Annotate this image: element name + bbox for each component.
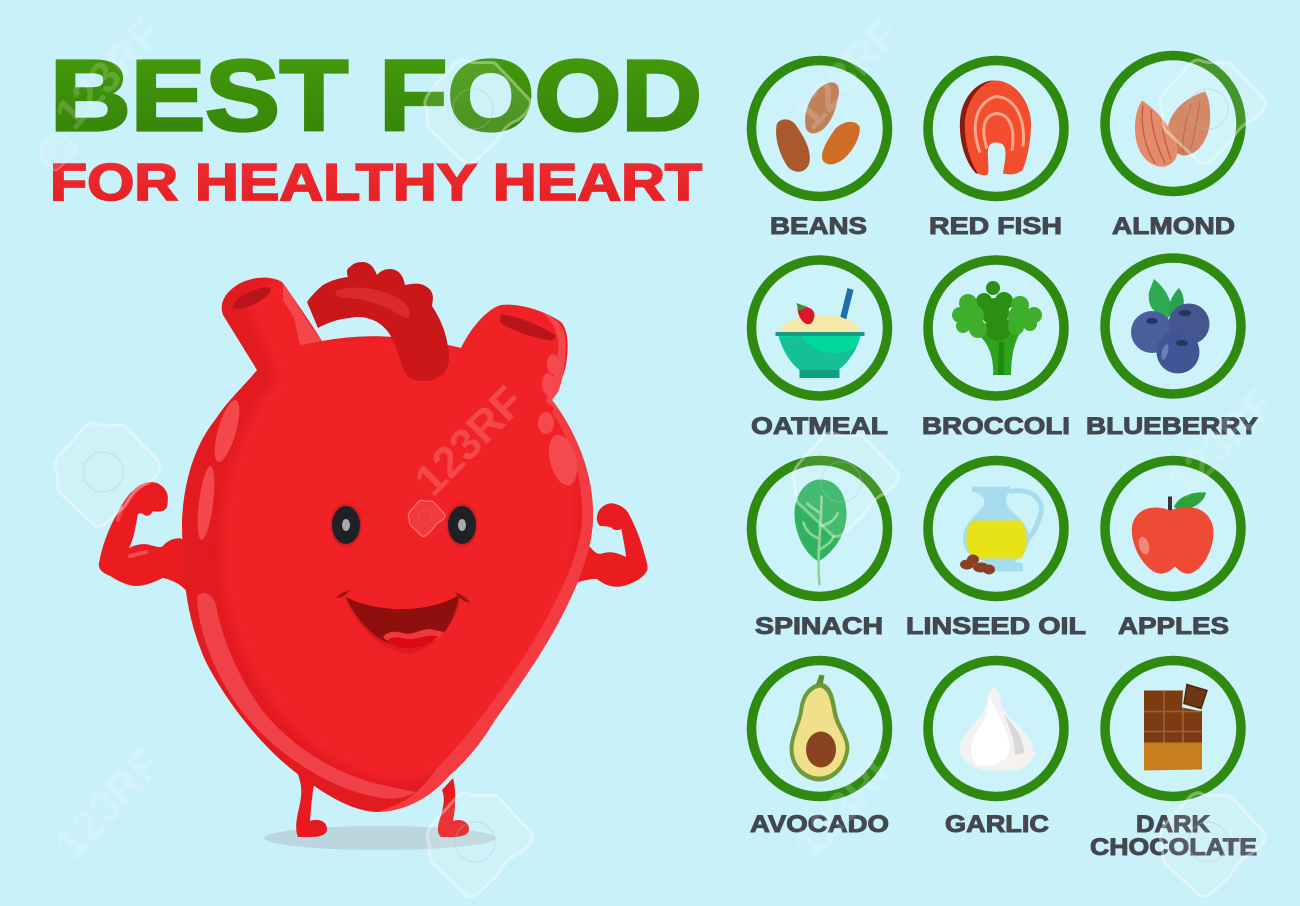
label: oatmeal: OATMEAL <box>751 413 888 440</box>
strawberry leaf <box>796 303 808 311</box>
avocado skin <box>790 682 850 782</box>
ring <box>928 660 1064 796</box>
jug handle <box>1010 491 1042 544</box>
leaf veins and stem <box>804 496 838 584</box>
ring <box>928 260 1064 396</box>
food item: spinach <box>752 460 888 596</box>
bowl <box>776 332 864 370</box>
left almond <box>1135 100 1178 167</box>
oil <box>966 520 1027 558</box>
strawberry <box>798 307 814 324</box>
berry right <box>1168 304 1210 344</box>
almond stripes <box>1142 106 1171 164</box>
fish steak flesh <box>965 80 1031 175</box>
watermark text: 123RF <box>45 739 171 869</box>
chocolate bar <box>1144 690 1202 742</box>
garlic bulb <box>960 688 1033 770</box>
ring <box>752 660 888 796</box>
heart body shading <box>197 270 593 812</box>
inner glow <box>222 270 579 781</box>
leaf <box>794 480 846 562</box>
food item: blueberry <box>1105 258 1241 394</box>
food item: almond <box>1105 56 1241 192</box>
garlic shade <box>1004 714 1024 762</box>
left arm <box>99 483 225 600</box>
aortic arch highlight <box>335 288 410 318</box>
berry left <box>1131 311 1173 353</box>
stem shade <box>998 342 1004 375</box>
watermark text: 123RF <box>1157 379 1285 507</box>
apple stem <box>1168 496 1172 512</box>
label: blueberry: BLUEBERRY <box>1086 413 1258 440</box>
left vessel highlight <box>283 284 322 345</box>
ring <box>752 60 888 196</box>
ground shadow <box>264 826 496 850</box>
label: red fish: RED FISH <box>929 213 1062 240</box>
ring <box>1105 258 1241 394</box>
chocolate broken piece <box>1184 684 1207 708</box>
right vessel opening <box>500 314 555 340</box>
right edge highlight band <box>375 404 593 812</box>
apple leaf <box>1174 492 1206 510</box>
left-bottom highlight band <box>197 593 416 799</box>
apple highlight <box>1137 536 1151 555</box>
stems <box>976 326 1020 375</box>
mid left highlight <box>195 465 217 541</box>
food item: garlic <box>928 660 1064 796</box>
bowl rim <box>776 332 864 336</box>
berry front <box>1156 330 1200 374</box>
label: garlic: GARLIC <box>945 811 1049 838</box>
watermark text: 123RF <box>405 377 533 505</box>
chocolate grid <box>1144 690 1202 742</box>
label: chocolate: CHOCOLATE <box>1090 834 1257 861</box>
right edge highlight blobs <box>538 354 582 488</box>
heart character <box>99 262 647 837</box>
label: linseed oil: LINSEED OIL <box>906 613 1086 640</box>
food item: apples <box>1105 460 1241 596</box>
right vessel edge <box>540 311 566 412</box>
linseeds <box>960 554 995 574</box>
label: dark: DARK <box>1136 811 1211 838</box>
spoon <box>840 288 854 322</box>
avocado flesh <box>794 688 846 776</box>
avocado stem <box>816 674 824 686</box>
food item: avocado <box>752 660 888 796</box>
bowl base <box>800 370 840 378</box>
leaves <box>1149 279 1171 318</box>
watermark text: 123RF <box>783 9 909 139</box>
avocado pit <box>806 732 836 768</box>
bowl shade <box>780 336 858 370</box>
subtitle: for healthy heart: FOR HEALTHY HEART <box>50 154 702 212</box>
aortic arch <box>307 262 449 381</box>
left eye <box>330 503 362 547</box>
watermark text: 123RF <box>45 9 171 139</box>
ring <box>752 460 888 596</box>
ring <box>1105 56 1241 192</box>
label: broccoli: BROCCOLI <box>922 413 1070 440</box>
food item: beans <box>752 60 888 196</box>
right almond <box>1167 92 1210 156</box>
mouth <box>336 590 470 654</box>
title: best food: BEST FOOD <box>50 40 702 152</box>
apple body <box>1132 507 1213 574</box>
jug body <box>963 486 1029 572</box>
garlic clove <box>971 696 1010 766</box>
label: spinach: SPINACH <box>755 613 883 640</box>
fish steak dark skin <box>960 80 993 174</box>
right floret <box>1008 296 1042 335</box>
left arm highlight <box>118 509 146 556</box>
label: avocado: AVOCADO <box>750 811 889 838</box>
label: beans: BEANS <box>770 213 867 240</box>
ring <box>928 60 1064 196</box>
ring <box>928 460 1064 596</box>
wrapper <box>1144 742 1202 770</box>
right eye <box>446 503 478 547</box>
centre floret <box>976 281 1013 341</box>
label: apples: APPLES <box>1118 613 1229 640</box>
food item: red fish <box>928 60 1064 196</box>
heart body base <box>182 278 593 812</box>
food item: oatmeal <box>752 260 888 396</box>
bean 3 <box>822 122 860 164</box>
berry tops <box>1146 318 1158 324</box>
left floret <box>952 294 987 338</box>
food item: dark chocolate <box>1105 660 1241 796</box>
garlic small clove <box>1001 752 1035 770</box>
right arm <box>575 504 647 586</box>
bean 1 <box>805 82 839 133</box>
label: almond: ALMOND <box>1112 213 1235 240</box>
food item: broccoli <box>928 260 1064 396</box>
ring <box>1105 660 1241 796</box>
ring <box>752 260 888 396</box>
ring <box>1105 460 1241 596</box>
right leg <box>438 778 469 837</box>
watermark text: 123RF <box>783 739 909 869</box>
left vessel opening <box>230 283 274 313</box>
berry shine <box>1160 343 1170 361</box>
food item: linseed oil <box>928 460 1064 596</box>
oats <box>780 314 860 332</box>
left leg <box>296 770 327 837</box>
bean 2 <box>776 119 810 172</box>
upper left highlight <box>210 398 244 464</box>
fish stripes <box>975 96 1024 152</box>
